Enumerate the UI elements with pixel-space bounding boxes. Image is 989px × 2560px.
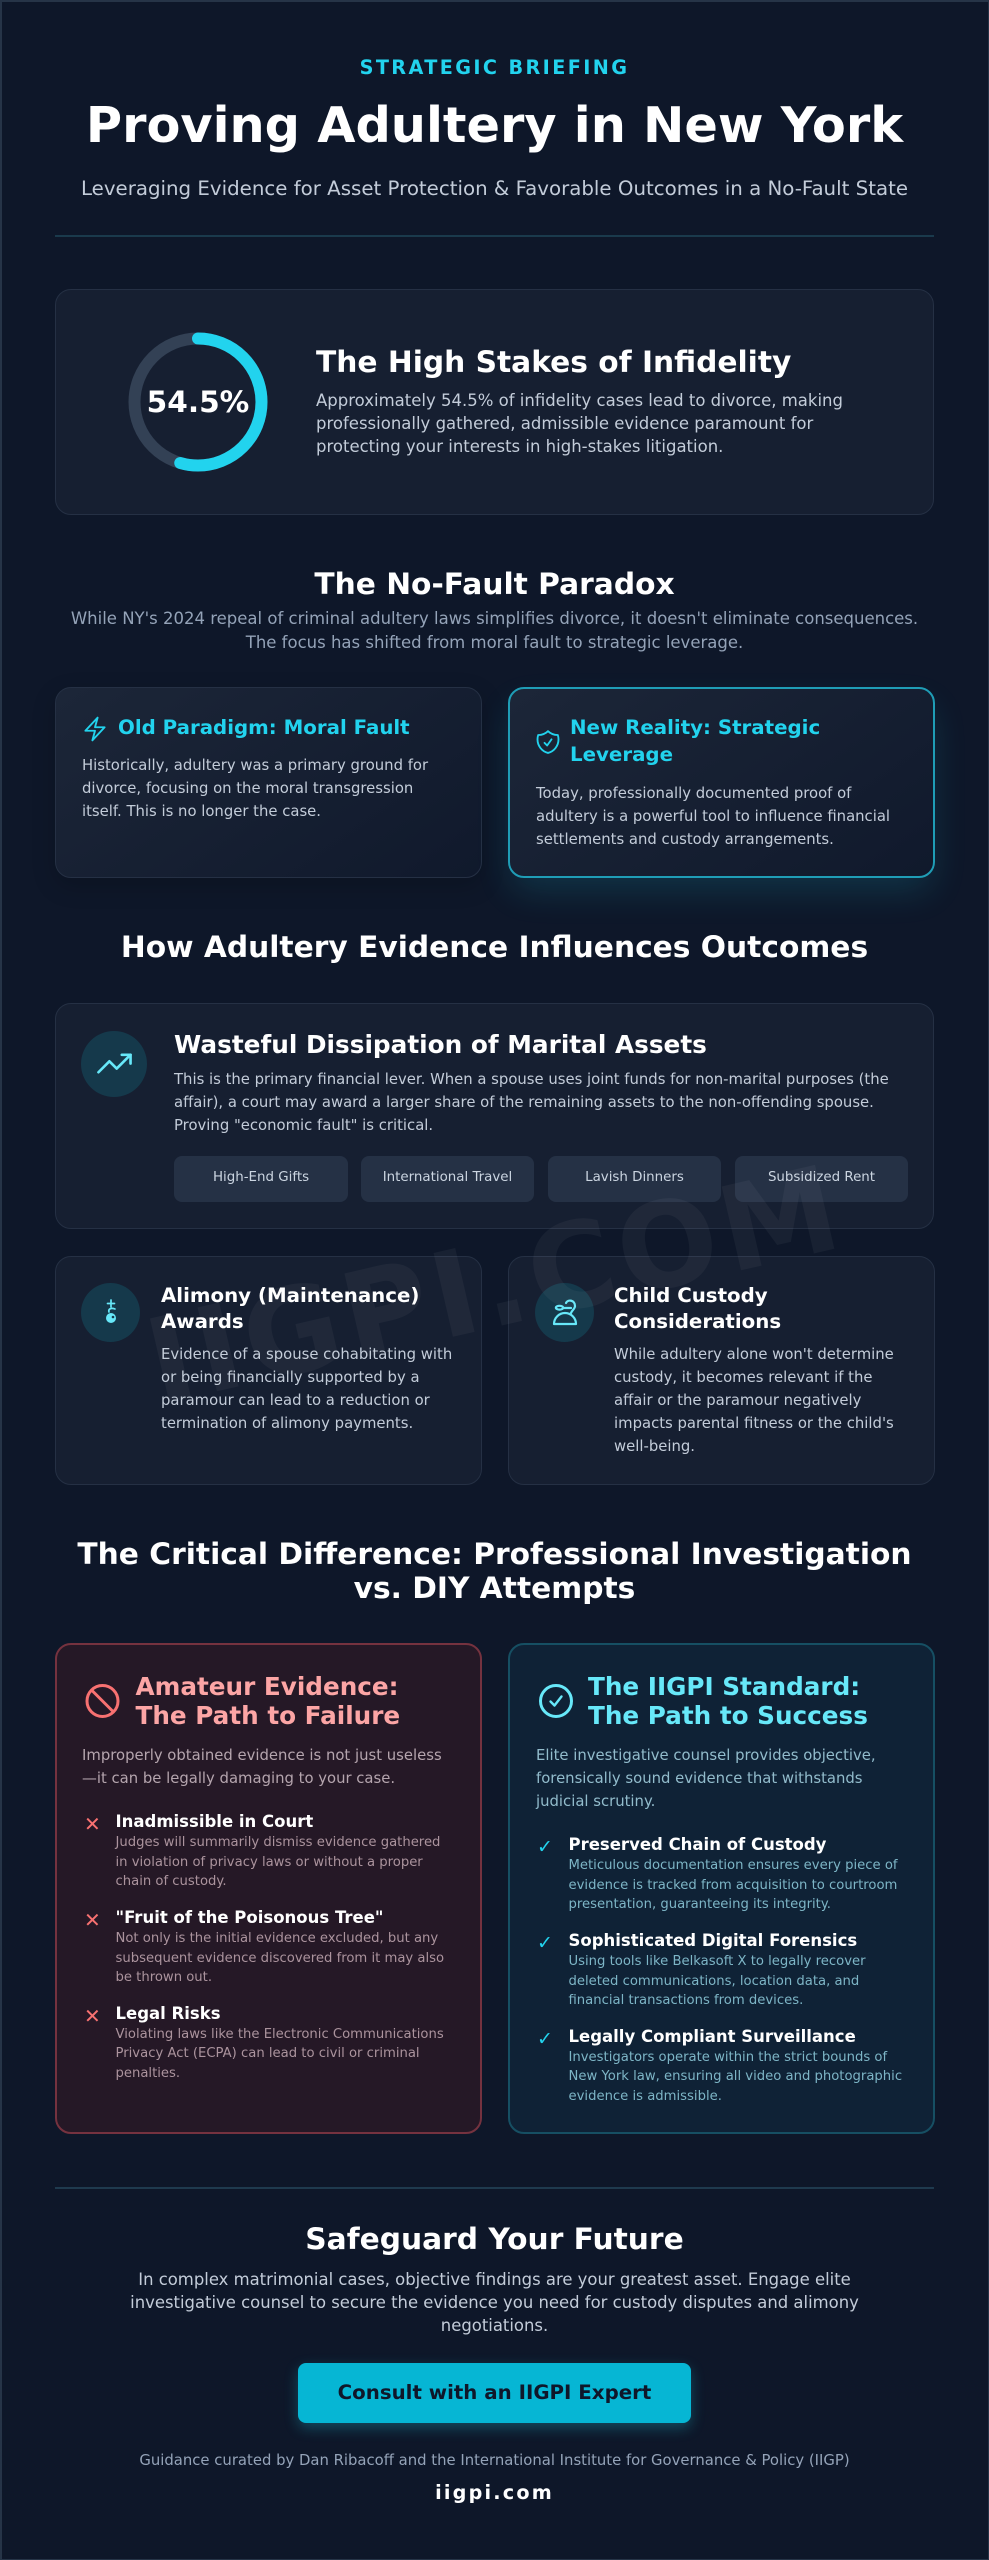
heading: the critical difference: The Critical Difference: Professional Investigation (77, 1537, 912, 1572)
child custody heading (614, 1284, 781, 1333)
donut chart: 54.5% (128, 332, 268, 472)
tag: lavish dinners: Lavish Dinners (585, 1170, 684, 1185)
item description: in violation of privacy laws or without a proper (116, 1855, 423, 1870)
new reality heading: Leverage (570, 743, 673, 766)
icon glyph: custody (552, 1300, 578, 1326)
footer url: iigpi.com (435, 2481, 554, 2504)
panel: new reality (508, 687, 935, 878)
heading: no-fault paradox: The No-Fault Paradox (314, 566, 675, 602)
icon: bolt (84, 716, 106, 742)
subtitle: Leveraging Evidence for Asset Protection & Favorable Outcomes in a No-Fault State (81, 177, 908, 200)
item: inadmissible (84, 1812, 440, 1889)
wasteful dissipation text: Proving "economic fault" is critical. (174, 1117, 433, 1134)
wasteful dissipation heading: Wasteful Dissipation of Marital Assets (174, 1030, 707, 1059)
child custody text: While adultery alone won't determine (614, 1346, 894, 1363)
closing text: investigative counsel to secure the evidence you need for custody disputes and alimony (130, 2293, 859, 2312)
new reality text: adultery is a powerful tool to influence financial (536, 808, 890, 824)
no-fault intro text: The focus has shifted from moral fault to strategic leverage. (246, 632, 743, 652)
panel text: high stakes: professionally gathered, admissible evidence paramount for (316, 414, 813, 433)
check mark: ✓ (537, 1932, 553, 1954)
check mark: ✓ (537, 1836, 553, 1858)
item description: evidence is tracked from acquisition to courtroom (568, 1878, 897, 1893)
new reality heading (570, 716, 820, 766)
child custody text: well-being. (614, 1438, 695, 1455)
tag: subsidized rent (735, 1156, 908, 1202)
panel heading: high stakes: The High Stakes of Infidelity (316, 345, 791, 380)
item description: New York law, ensuring all video and photographic (568, 2069, 902, 2084)
item description: Not only is the initial evidence excluded, but any (116, 1931, 438, 1946)
tag: international travel (361, 1156, 534, 1202)
heading: the critical difference (77, 1537, 912, 1606)
child custody heading: Considerations (614, 1310, 781, 1333)
no-fault intro text (71, 609, 918, 652)
old paradigm text: divorce, focusing on the moral transgression (82, 780, 413, 797)
tag: subsidized rent: Subsidized Rent (768, 1170, 875, 1185)
alimony text: paramour can lead to a reduction or (161, 1392, 430, 1409)
iigpi intro (536, 1747, 876, 1810)
alimony text: or being financially supported by a (161, 1369, 420, 1386)
x mark: ✕ (84, 1812, 101, 1836)
old paradigm heading: Old Paradigm: Moral Fault (118, 716, 410, 738)
heading: how evidence influences outcomes: How Adultery Evidence Influences Outcomes (121, 930, 868, 965)
panel text: high stakes (316, 391, 843, 456)
item title: "Fruit of the Poisonous Tree" (116, 1908, 384, 1927)
old paradigm text: itself. This is no longer the case. (82, 803, 321, 820)
button: consult (298, 2363, 691, 2423)
item: poisonous tree (84, 1908, 444, 1985)
icon: prohibited (86, 1684, 120, 1718)
item title: Legal Risks (116, 2004, 221, 2022)
button: consult: Consult with an IIGPI Expert (338, 2381, 651, 2404)
panel text: high stakes: protecting your interests in high-stakes litigation. (316, 437, 723, 456)
donut value: 54.5% (147, 385, 249, 419)
icon glyph: trend arrow (97, 1053, 132, 1074)
item description (568, 1858, 898, 1912)
old paradigm text: Historically, adultery was a primary ground for (82, 757, 428, 774)
item description: Violating laws like the Electronic Communications (116, 2026, 444, 2042)
child custody text (614, 1346, 894, 1455)
new reality text: settlements and custody arrangements. (536, 830, 834, 848)
amateur intro: —it can be legally damaging to your case. (82, 1770, 395, 1787)
item description (116, 1931, 444, 1985)
amateur heading: Amateur Evidence: (136, 1672, 399, 1701)
alimony text (161, 1346, 452, 1432)
x mark: ✕ (84, 1908, 101, 1932)
item title: Sophisticated Digital Forensics (568, 1931, 857, 1950)
icon glyph: alimony (106, 1299, 116, 1323)
panel: child custody (508, 1256, 935, 1485)
alimony heading (161, 1284, 419, 1333)
new reality heading: New Reality: Strategic (570, 716, 820, 739)
alimony text: termination of alimony payments. (161, 1415, 413, 1432)
panel: wasteful dissipation (55, 1003, 934, 1229)
item description: Privacy Act (ECPA) can lead to civil or criminal (116, 2046, 420, 2061)
item: legal risks (84, 2004, 444, 2081)
item: chain of custody (537, 1835, 898, 1912)
icon: trending up (81, 1031, 147, 1097)
x mark: ✕ (84, 2004, 101, 2028)
no-fault intro text: While NY's 2024 repeal of criminal adultery laws simplifies divorce, it doesn't eliminate consequences. (71, 609, 918, 628)
wasteful dissipation text (174, 1071, 889, 1134)
eyebrow: strategic briefing: STRATEGIC BRIEFING (360, 56, 629, 79)
iigpi heading: The Path to Success (588, 1701, 868, 1730)
amateur heading: The Path to Failure (136, 1701, 400, 1730)
panel: alimony (55, 1256, 482, 1485)
child custody heading: Child Custody (614, 1284, 768, 1306)
closing text: negotiations. (441, 2316, 548, 2335)
child custody text: impacts parental fitness or the child's (614, 1415, 894, 1432)
item description: presentation, guaranteeing its integrity. (568, 1897, 831, 1912)
tag: high-end gifts (174, 1156, 348, 1202)
icon: alimony circle (81, 1283, 140, 1342)
closing text (130, 2270, 859, 2335)
item description: be thrown out. (116, 1970, 212, 1985)
check mark: ✓ (537, 2028, 553, 2050)
item description (568, 2050, 902, 2104)
panel: amateur evidence (55, 1643, 482, 2134)
item title: Inadmissible in Court (116, 1812, 313, 1831)
amateur intro: Improperly obtained evidence is not just useless (82, 1747, 442, 1764)
icon: shield check (536, 730, 560, 754)
panel: iigpi standard (508, 1643, 935, 2134)
item description: chain of custody. (116, 1874, 227, 1889)
item: digital forensics (537, 1931, 866, 2008)
item title: Preserved Chain of Custody (568, 1835, 826, 1854)
item description: Meticulous documentation ensures every piece of (568, 1858, 898, 1873)
item description: Using tools like Belkasoft X to legally recover (568, 1954, 866, 1969)
child custody text: custody, it becomes relevant if the (614, 1369, 873, 1386)
heading: safeguard your future: Safeguard Your Future (305, 2222, 684, 2256)
item: compliant surveillance (537, 2026, 902, 2104)
amateur intro (82, 1747, 442, 1787)
item description: evidence is admissible. (568, 2089, 722, 2104)
closing text: In complex matrimonial cases, objective findings are your greatest asset. Engage elite (138, 2270, 851, 2289)
alimony heading: Alimony (Maintenance) (161, 1284, 419, 1306)
child custody text: affair or the paramour negatively (614, 1392, 861, 1409)
title: Proving Adultery in New York (86, 96, 903, 154)
tag: international travel: International Travel (383, 1170, 512, 1185)
watermark: IIGPI.COM (133, 1138, 856, 1432)
item description (568, 1954, 866, 2008)
iigpi intro: judicial scrutiny. (536, 1793, 655, 1810)
old paradigm text (82, 757, 428, 820)
icon: custody circle (535, 1283, 594, 1342)
item description: Investigators operate within the strict bounds of (568, 2050, 887, 2064)
item title: Legally Compliant Surveillance (568, 2026, 856, 2046)
new reality text (536, 784, 890, 848)
item description (114, 1835, 440, 1889)
footer credit: Guidance curated by Dan Ribacoff and the International Institute for Governance & Policy (IIGP) (139, 2452, 850, 2469)
panel: high stakes of infidelity (55, 289, 934, 515)
alimony heading: Awards (161, 1310, 244, 1333)
iigpi intro: forensically sound evidence that withstands (536, 1770, 863, 1787)
heading: the critical difference: vs. DIY Attempts (354, 1571, 635, 1606)
icon: check circle (539, 1684, 573, 1718)
iigpi intro: Elite investigative counsel provides objective, (536, 1747, 876, 1764)
amateur heading (136, 1672, 400, 1730)
tag: lavish dinners (548, 1156, 721, 1202)
alimony text: Evidence of a spouse cohabitating with (161, 1346, 452, 1363)
item description (116, 2026, 444, 2081)
panel: old paradigm (55, 687, 482, 878)
new reality text: Today, professionally documented proof of (536, 784, 851, 802)
panel text: high stakes: Approximately 54.5% of infidelity cases lead to divorce, making (316, 391, 843, 410)
item description: Judges will summarily dismiss evidence gathered (116, 1835, 440, 1850)
item description: penalties. (116, 2066, 180, 2081)
iigpi heading (588, 1672, 868, 1730)
wasteful dissipation text: This is the primary financial lever. When a spouse uses joint funds for non-marital purposes (the (174, 1071, 889, 1088)
item description: subsequent evidence discovered from it may also (116, 1951, 444, 1966)
iigpi heading: The IIGPI Standard: (588, 1672, 860, 1701)
item description: financial transactions from devices. (568, 1993, 803, 2008)
wasteful dissipation text: affair), a court may award a larger share of the remaining assets to the non-offending spouse. (174, 1094, 874, 1111)
item description: deleted communications, location data, and (568, 1974, 859, 1989)
tag: high-end gifts: High-End Gifts (213, 1170, 309, 1185)
